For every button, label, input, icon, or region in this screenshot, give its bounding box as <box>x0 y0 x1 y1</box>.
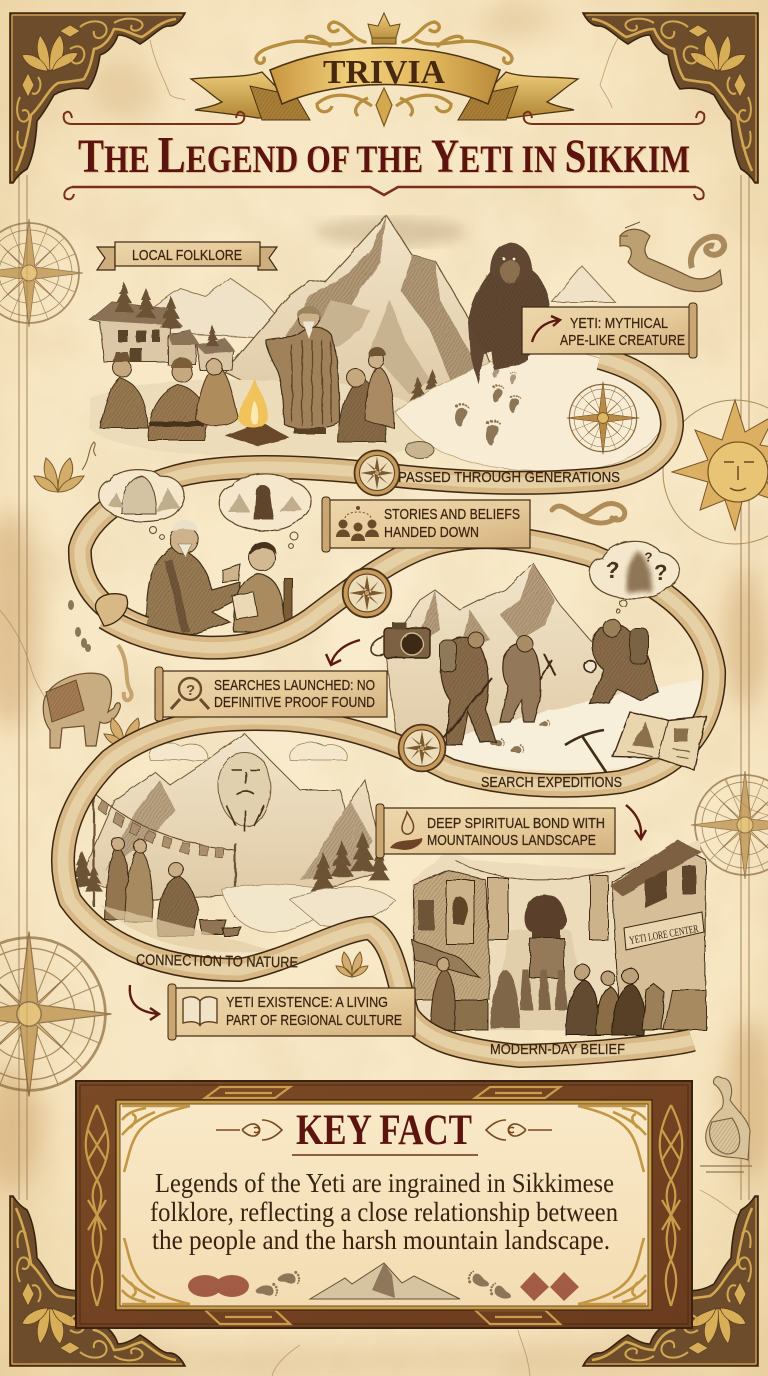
far mountains <box>120 278 300 340</box>
ornament below banner <box>317 88 451 126</box>
story path ribbon <box>63 358 714 1056</box>
corner ornament top right <box>583 13 758 183</box>
medallion compass lower <box>399 725 445 771</box>
question thought cloud: ? <box>645 550 653 565</box>
corner ornament bottom right <box>583 1196 758 1366</box>
icon: magnifier <box>171 678 209 709</box>
footprints in snow <box>490 710 551 757</box>
side border lines <box>19 175 749 1200</box>
yeti figure <box>468 243 550 384</box>
crown <box>368 13 400 44</box>
label: stories and beliefs <box>322 497 530 552</box>
icon: open book <box>183 997 217 1025</box>
kneeling searcher <box>584 619 658 704</box>
bottom motif row <box>188 1263 579 1301</box>
label: spiritual bond: DEEP SPIRITUAL BOND WITH <box>427 815 605 832</box>
medallion compass middle <box>343 569 391 617</box>
ribbon label: passed through generations: PASSED THROUGH GENERATIONS <box>398 469 620 486</box>
icon: magnifier: ? <box>186 682 195 699</box>
question thought cloud: ? <box>605 557 620 584</box>
peacock <box>700 1077 752 1172</box>
plaza and statue <box>490 930 590 1030</box>
label: yeti mythical creature: YETI: MYTHICAL <box>570 315 668 332</box>
elder seated <box>146 520 240 634</box>
snow field <box>385 680 701 771</box>
scene: local folklore campfire <box>90 215 672 472</box>
icon: footprints left <box>255 1270 302 1301</box>
seated villagers <box>100 352 238 440</box>
corner filigree <box>122 1106 646 1304</box>
trivia text: TRIVIA <box>323 54 445 91</box>
scene: connection to nature <box>70 733 395 952</box>
ribbon label: connection to nature: CONNECTION TO NATURE <box>136 952 298 971</box>
sun face <box>663 400 768 544</box>
label: spiritual bond: MOUNTAINOUS LANDSCAPE <box>427 832 596 849</box>
hanging banners <box>446 876 608 944</box>
scroll ornament right <box>552 503 625 523</box>
corner ornament top left <box>10 13 185 183</box>
corner ornament bottom left <box>10 1196 185 1366</box>
ribbon label: search expeditions: SEARCH EXPEDITIONS <box>481 774 622 791</box>
icon: hand and flame <box>390 812 422 850</box>
label: local folklore: LOCAL FOLKLORE <box>132 247 242 264</box>
label: spiritual bond <box>376 804 615 858</box>
yeti face <box>218 753 270 832</box>
dragon <box>620 222 724 292</box>
label: yeti existence: YETI EXISTENCE: A LIVING <box>226 994 388 1011</box>
ribbon label: modern-day belief: MODERN-DAY BELIEF <box>490 1041 625 1058</box>
scene: elder and child storytelling <box>146 520 292 634</box>
compass rose right middle <box>691 771 768 879</box>
small far peak <box>552 266 615 302</box>
thought bubbles <box>150 526 298 548</box>
label: yeti existence: PART OF REGIONAL CULTURE <box>226 1012 402 1029</box>
pine trees <box>114 282 439 401</box>
main title: THE LEGEND OF THE YETI IN SIKKIM <box>78 127 690 184</box>
icon: endless knots <box>520 1272 579 1301</box>
key fact body text: folklore, reflecting a close relationship between <box>150 1197 618 1227</box>
ribbon band <box>270 48 500 104</box>
camera <box>370 622 430 658</box>
panel: key fact <box>76 1081 692 1328</box>
title banner <box>191 13 578 126</box>
icon: footprints right <box>466 1270 513 1300</box>
worshippers <box>105 838 242 936</box>
rocks <box>406 442 434 458</box>
thought cloud with yeti silhouette <box>219 473 311 531</box>
back crowd <box>490 970 568 1028</box>
elder storyteller <box>266 306 340 434</box>
forest right <box>70 832 390 892</box>
scene: search expedition <box>370 563 701 771</box>
label: yeti mythical creature <box>522 303 697 358</box>
label: searches launched <box>155 667 387 721</box>
thought cloud with yeti and peaks <box>99 470 184 522</box>
awning <box>412 940 480 978</box>
campfire <box>225 378 290 446</box>
main mountain <box>225 215 500 410</box>
ice axe <box>565 730 606 772</box>
heading: key fact: KEY FACT <box>296 1107 472 1154</box>
climber two <box>500 636 556 722</box>
seated listeners right <box>338 347 394 442</box>
foreground people <box>566 964 664 1035</box>
medallion compass top <box>354 450 400 496</box>
ribbon tails <box>191 72 300 118</box>
foreground hill <box>100 905 270 952</box>
label: yeti mythical creature: APE-LIKE CREATURE <box>560 332 685 349</box>
climber one <box>440 632 496 745</box>
yeti mountain <box>80 733 385 900</box>
cloud puffs <box>149 742 347 760</box>
key fact body text: Legends of the Yeti are ingrained in Sikkimese <box>155 1168 614 1198</box>
footprints left margin <box>68 600 91 652</box>
child seated <box>232 541 292 632</box>
lotus ornament left <box>34 442 96 492</box>
compass rose lower left <box>0 932 111 1096</box>
yeti lore center sign <box>624 912 704 950</box>
lake <box>222 884 340 932</box>
arrow: red curved <box>532 316 560 342</box>
journal book <box>613 712 706 770</box>
outer frame <box>76 1081 692 1328</box>
yeti lore center sign: YETI LORE CENTER <box>628 923 700 947</box>
label: local folklore <box>97 242 277 270</box>
key fact body text <box>150 1168 618 1255</box>
village <box>90 302 236 370</box>
question thought cloud <box>590 541 680 599</box>
ground <box>90 380 440 457</box>
inner panel <box>116 1100 652 1310</box>
compass rose on slope <box>567 382 639 454</box>
distant mountains <box>385 563 660 760</box>
icon: people <box>336 506 379 541</box>
left buildings <box>414 870 490 1000</box>
label: searches launched: SEARCHES LAUNCHED: NO <box>214 677 375 694</box>
icon: knot <box>188 1275 249 1297</box>
label: yeti existence <box>168 984 415 1040</box>
market stall <box>452 1000 488 1030</box>
shore <box>290 887 395 926</box>
heading ornaments <box>216 1120 552 1155</box>
scene: modern day town <box>412 840 706 1035</box>
right buildings <box>612 844 706 1030</box>
title dividers <box>64 112 704 199</box>
arrow: down right <box>626 805 646 839</box>
label: searches launched: DEFINITIVE PROOF FOUND <box>214 694 375 711</box>
label: stories and beliefs: HANDED DOWN <box>384 524 479 541</box>
label: stories and beliefs: STORIES AND BELIEFS <box>384 506 520 523</box>
lotus near ribbon <box>336 952 368 977</box>
icon: mountains <box>310 1263 460 1299</box>
arrow: down left <box>326 640 360 665</box>
compass rose upper left <box>0 219 83 327</box>
key fact body text: the people and the harsh mountain landscape. <box>152 1225 610 1255</box>
question thought cloud: ? <box>654 560 667 585</box>
arrow: bottom curved <box>130 985 159 1020</box>
snow slope with footprints <box>395 350 672 472</box>
frame side knotwork <box>86 1087 682 1324</box>
elephant <box>43 673 120 748</box>
prayer flags <box>94 783 235 917</box>
small lotus near ribbon <box>104 718 146 746</box>
crest ornaments above banner <box>256 22 512 63</box>
